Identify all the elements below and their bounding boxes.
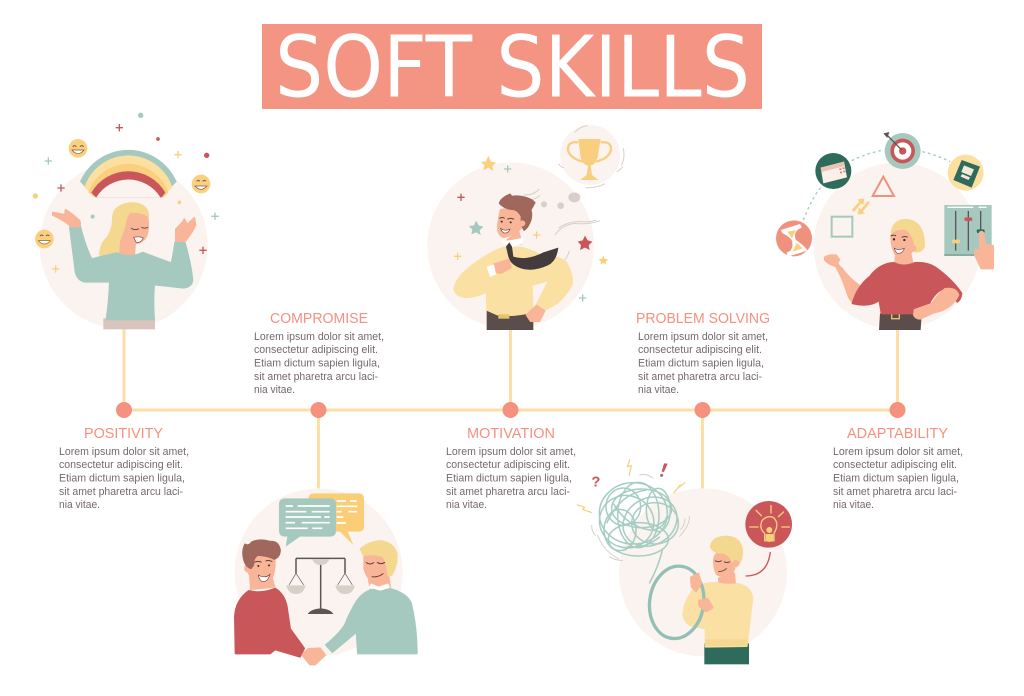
text block: consectetur adipiscing elit. — [446, 459, 570, 471]
text block: nia vitae. — [833, 499, 874, 511]
illustration: woman with rainbow — [33, 113, 219, 329]
text block: Etiam dictum sapien ligula, — [446, 472, 572, 484]
illustration: man with trophy and flying tie — [427, 125, 624, 330]
illustration: two men shaking hands — [235, 488, 417, 664]
panel: motivation — [427, 125, 624, 511]
text block: sit amet pharetra arcu laci- — [638, 371, 762, 383]
illustration: man untangling a hose — [577, 459, 792, 664]
text block — [59, 446, 189, 511]
text block: sit amet pharetra arcu laci- — [833, 486, 957, 498]
text block — [638, 331, 768, 396]
text block — [446, 446, 576, 511]
text block: consectetur adipiscing elit. — [638, 344, 762, 356]
text block: consectetur adipiscing elit. — [254, 344, 378, 356]
text block: nia vitae. — [638, 384, 679, 396]
text block: Etiam dictum sapien ligula, — [833, 472, 959, 484]
title banner: SOFT SKILLS — [275, 18, 750, 118]
text block — [254, 331, 384, 396]
text block: nia vitae. — [59, 499, 100, 511]
text block: Lorem ipsum dolor sit amet, — [254, 331, 384, 343]
text block: Etiam dictum sapien ligula, — [638, 358, 764, 370]
heading: MOTIVATION — [467, 426, 555, 442]
text block: sit amet pharetra arcu laci- — [446, 486, 570, 498]
text block: Lorem ipsum dolor sit amet, — [638, 331, 768, 343]
text block: Etiam dictum sapien ligula, — [254, 358, 380, 370]
heading: ADAPTABILITY — [847, 426, 948, 442]
text block: Lorem ipsum dolor sit amet, — [833, 446, 963, 458]
text block: Lorem ipsum dolor sit amet, — [446, 446, 576, 458]
text block: sit amet pharetra arcu laci- — [254, 371, 378, 383]
illustration: man untangling a hose: ? — [591, 475, 600, 491]
text block: Lorem ipsum dolor sit amet, — [59, 446, 189, 458]
text block: Etiam dictum sapien ligula, — [59, 472, 185, 484]
text block: consectetur adipiscing elit. — [59, 459, 183, 471]
timeline — [116, 329, 906, 490]
heading: POSITIVITY — [84, 426, 163, 442]
text block: nia vitae. — [254, 384, 295, 396]
heading: PROBLEM SOLVING — [636, 311, 770, 327]
illustration: woman with planning icons — [776, 132, 993, 330]
panel: positivity — [33, 113, 219, 511]
panel: compromise — [235, 311, 417, 664]
text block: nia vitae. — [446, 499, 487, 511]
heading: COMPROMISE — [270, 311, 368, 327]
text block — [833, 446, 963, 511]
panel: adaptability — [776, 132, 993, 511]
text block: consectetur adipiscing elit. — [833, 459, 957, 471]
text block: sit amet pharetra arcu laci- — [59, 486, 183, 498]
panel: problem solving — [577, 311, 792, 664]
